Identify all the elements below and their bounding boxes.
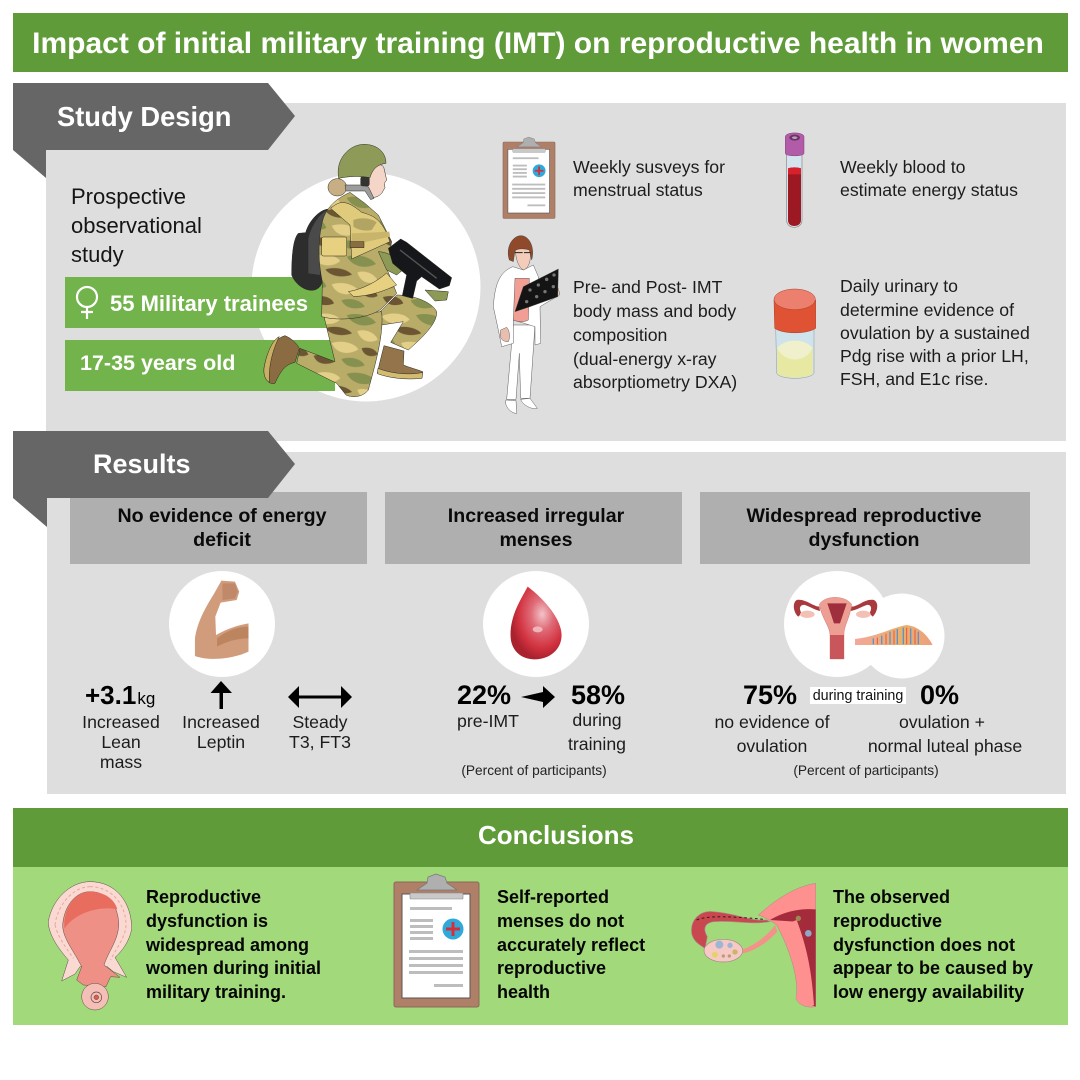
title banner (13, 13, 1068, 72)
conclusion one text: women during initial (145, 958, 321, 978)
lean mass value: +3.1kg (85, 680, 155, 710)
energy deficit heading: No evidence of energy (117, 505, 327, 527)
icon: clipboard (503, 137, 555, 218)
thyroid label: Steady (292, 712, 348, 732)
icon: doctor with x-ray (493, 236, 559, 413)
icon: kneeling soldier (264, 144, 452, 397)
conclusion one text: Reproductive (146, 887, 261, 907)
study type text: Prospective (71, 184, 186, 209)
study design heading: Study Design (57, 101, 231, 132)
conclusion three text: The observed (833, 887, 950, 907)
body composition text: Pre- and Post- IMT (573, 277, 723, 297)
dysfunction heading: dysfunction (808, 529, 920, 551)
arrow: up (210, 681, 232, 709)
body composition text: (dual-energy x-ray (573, 349, 717, 369)
body composition text: composition (573, 325, 667, 345)
during training tag: during training (813, 688, 903, 704)
urinary text: ovulation by a sustained (840, 323, 1030, 343)
during training label: training (568, 734, 626, 754)
icon: flexed arm (169, 571, 275, 677)
survey text: Weekly susveys for (573, 157, 725, 177)
blood text: estimate energy status (840, 180, 1018, 200)
pre-IMT label: pre-IMT (457, 711, 519, 731)
lean mass label: Lean (101, 732, 141, 752)
dysfunction value: 75% (743, 680, 797, 710)
during training label: during (572, 710, 622, 730)
study design banner (13, 83, 295, 178)
conclusion three text: reproductive (833, 911, 942, 931)
icon: uterus and endometrium (784, 571, 944, 678)
conclusion three text: low energy availability (833, 982, 1024, 1002)
icon: clipboard (394, 874, 479, 1007)
conclusion two text: health (497, 982, 550, 1002)
header: reproductive dysfunction (700, 492, 1030, 564)
title: Impact of initial military training (IMT) on reproductive health in women (32, 27, 1044, 60)
irregular menses heading: Increased irregular (448, 505, 625, 527)
arrow: double horizontal (288, 686, 352, 708)
energy deficit heading: deficit (193, 529, 251, 551)
ovulation value: 0% (920, 680, 959, 710)
urinary text: Daily urinary to (840, 276, 958, 296)
participants bar (65, 277, 335, 328)
icon: female symbol (77, 287, 97, 319)
panel: study design (13, 83, 1066, 441)
no ovulation label: ovulation (737, 736, 807, 756)
conclusion one text: military training. (146, 982, 286, 1002)
urinary text: determine evidence of (840, 300, 1014, 320)
panel: results (13, 431, 1066, 794)
lean mass label: mass (100, 752, 142, 772)
conclusion one text: dysfunction is (146, 911, 268, 931)
age range: 17-35 years old (80, 351, 235, 375)
panel: conclusions (13, 808, 1068, 1025)
percent note: (Percent of participants) (793, 763, 939, 778)
study type text: study (71, 242, 124, 267)
results banner (13, 431, 295, 527)
participants count: 55 Military trainees (110, 291, 308, 316)
icon: ovary and fallopian tube (691, 883, 816, 1007)
irregular menses heading: menses (500, 529, 573, 551)
lean mass label: Increased (82, 712, 160, 732)
study type text: observational (71, 213, 202, 238)
normal ovulation label: ovulation + (899, 712, 985, 732)
conclusions header bar (13, 808, 1068, 867)
urinary text: FSH, and E1c rise. (840, 369, 988, 389)
icon: uterus section (48, 882, 132, 1010)
age bar (65, 340, 335, 391)
body composition text: absorptiometry DXA) (573, 372, 737, 392)
conclusion two text: menses do not (497, 911, 624, 931)
header: energy deficit (70, 492, 367, 564)
survey text: menstrual status (573, 180, 703, 200)
conclusion three text: appear to be caused by (833, 958, 1033, 978)
percent note: (Percent of participants) (461, 763, 607, 778)
dysfunction heading: Widespread reproductive (746, 505, 982, 527)
header: irregular menses (385, 492, 682, 564)
conclusion two text: Self-reported (497, 887, 609, 907)
leptin label: Leptin (197, 732, 245, 752)
conclusions heading: Conclusions (478, 820, 634, 850)
conclusion three text: dysfunction does not (833, 935, 1015, 955)
urinary text: Pdg rise with a prior LH, (840, 346, 1029, 366)
icon: blood tube (785, 133, 804, 227)
thyroid label: T3, FT3 (289, 732, 351, 752)
conclusion one text: widespread among (145, 935, 309, 955)
conclusion two text: accurately reflect (497, 935, 645, 955)
icon: blood drop (483, 571, 589, 677)
icon: urine cup (774, 289, 816, 378)
normal ovulation label: normal luteal phase (868, 736, 1022, 756)
body composition text: body mass and body (573, 301, 736, 321)
pre-IMT value: 22% (457, 680, 511, 710)
arrow: pre to during (521, 686, 555, 708)
blood text: Weekly blood to (840, 157, 966, 177)
no ovulation label: no evidence of (714, 712, 830, 732)
during value: 58% (571, 680, 625, 710)
conclusion two text: reproductive (497, 958, 606, 978)
leptin label: Increased (182, 712, 260, 732)
results heading: Results (93, 449, 191, 479)
soldier backdrop circle (252, 172, 480, 402)
